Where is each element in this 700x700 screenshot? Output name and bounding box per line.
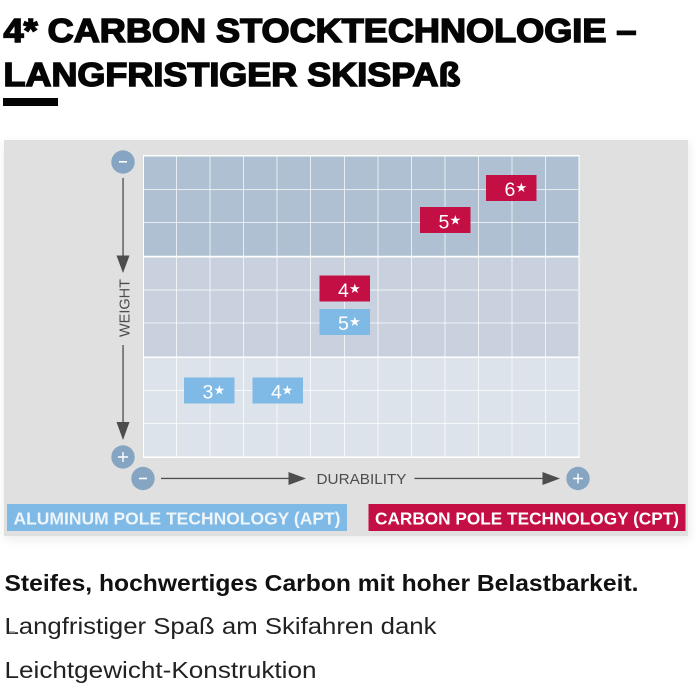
panel: chart background	[4, 140, 688, 536]
marker: aluminum 3 star: ★	[214, 382, 225, 398]
icon: durability minus	[131, 467, 155, 490]
text: benefit line two: Leichtgewicht-Konstruktion	[4, 657, 316, 683]
marker: aluminum 4 star: ★	[282, 382, 293, 398]
title	[4, 12, 636, 93]
marker: carbon 5 star: 5	[438, 212, 450, 234]
icon: weight plus	[111, 445, 135, 469]
text: bold statement: Steifes, hochwertiges Carbon mit hoher Belastbarkeit.	[4, 570, 638, 596]
icon: weight minus	[111, 150, 135, 174]
arrow: durability left	[161, 472, 306, 485]
marker: aluminum 4 star	[252, 378, 303, 404]
marker: aluminum 5 star	[320, 309, 370, 335]
text: benefit line one: Langfristiger Spaß am Skifahren dank	[4, 613, 437, 639]
marker: aluminum 5 star: 5	[338, 313, 349, 335]
arrow: durability right	[414, 472, 560, 485]
arrow: weight upper	[116, 178, 130, 273]
marker: carbon 4 star	[320, 276, 370, 302]
title: LANGFRISTIGER SKISPAß	[4, 56, 460, 93]
title underline	[3, 98, 58, 106]
arrow: weight lower	[116, 345, 130, 440]
marker: carbon 6 star: 6	[504, 179, 515, 201]
weight label: WEIGHT	[116, 279, 134, 337]
panel shadow	[4, 142, 690, 540]
marker: aluminum 5 star: ★	[349, 314, 361, 329]
title: 4* CARBON STOCKTECHNOLOGIE –	[4, 12, 636, 49]
marker: carbon 4 star: 4	[338, 280, 349, 302]
marker: carbon 6 star: ★	[516, 180, 527, 195]
marker: aluminum 4 star: 4	[271, 382, 282, 404]
marker: aluminum 3 star: 3	[202, 382, 213, 404]
legend: carbon pole technology: CARBON POLE TECHNOLOGY (CPT)	[375, 508, 679, 528]
durability label: DURABILITY	[316, 471, 406, 488]
icon: durability plus	[566, 467, 590, 490]
marker: aluminum 3 star	[184, 378, 234, 404]
marker: carbon 6 star	[486, 175, 536, 201]
legend: aluminum pole technology: ALUMINUM POLE TECHNOLOGY (APT)	[14, 508, 340, 528]
chart grid	[143, 155, 580, 458]
marker: carbon 5 star: ★	[450, 212, 461, 228]
marker: carbon 4 star: ★	[349, 281, 361, 296]
marker: carbon 5 star	[420, 207, 470, 234]
